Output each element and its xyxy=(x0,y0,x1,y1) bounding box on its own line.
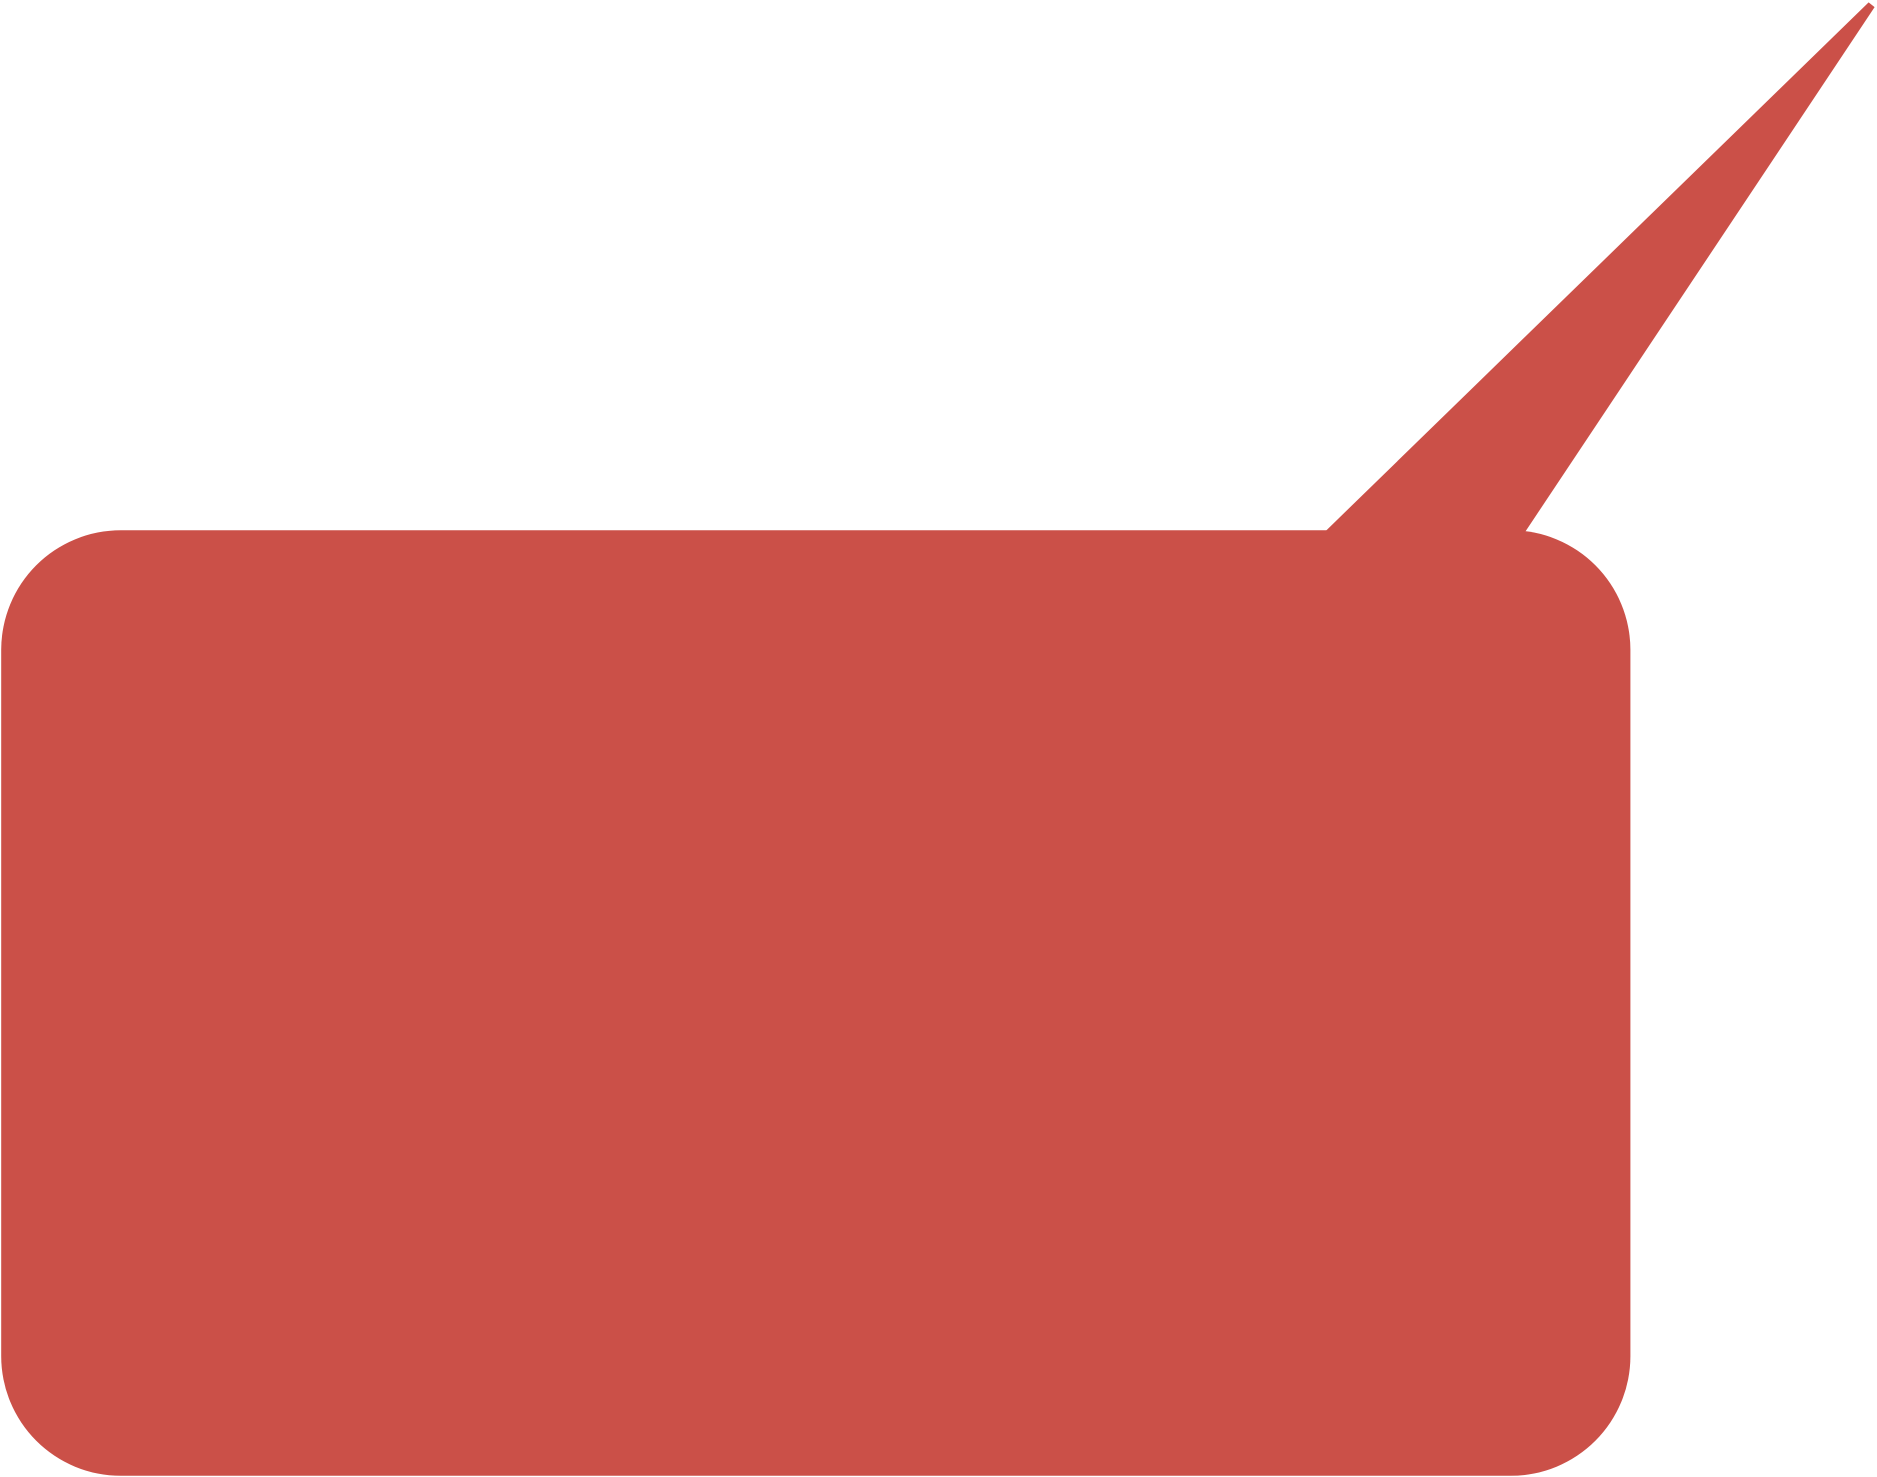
bubble tail xyxy=(1323,2,1875,534)
bubble body xyxy=(1,530,1630,1476)
